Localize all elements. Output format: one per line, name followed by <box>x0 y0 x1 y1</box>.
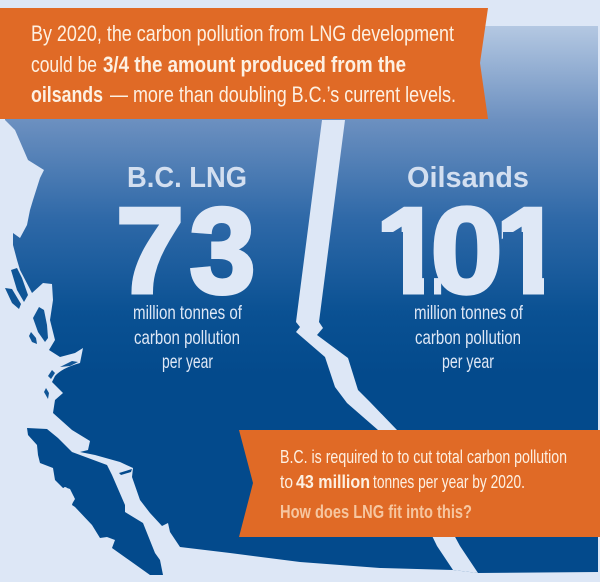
map: island lake <box>64 487 75 504</box>
banner text: 43 million <box>296 472 370 492</box>
banner text <box>280 447 567 522</box>
number: 73: 3 <box>190 182 256 318</box>
top banner <box>0 8 488 119</box>
banner text: — more than doubling B.C.’s current levels. <box>110 82 456 107</box>
banner text: tonnes per year by 2020. <box>373 472 525 492</box>
banner text: By 2020, the carbon pollution from LNG development <box>31 21 454 46</box>
caption <box>414 302 523 373</box>
banner text: could be <box>31 52 97 77</box>
number: 101: 0 <box>431 182 503 318</box>
caption: million tonnes of <box>414 302 523 324</box>
banner text: to <box>280 472 293 492</box>
map: small channel <box>119 469 132 475</box>
map: Vancouver Island <box>27 428 163 575</box>
caption: million tonnes of <box>133 302 242 324</box>
heading: B.C. LNG: B.C. LNG <box>127 162 247 194</box>
number: 101: 1 <box>376 182 442 318</box>
banner text <box>31 21 456 107</box>
caption: carbon pollution <box>415 327 521 349</box>
banner text: 3/4 the amount produced from the <box>103 52 406 77</box>
bottom banner <box>239 430 600 537</box>
map: coastal inlets <box>5 268 78 399</box>
caption: carbon pollution <box>134 327 240 349</box>
number: 73: 7 <box>116 182 184 318</box>
B.C. LNG stat <box>116 162 256 373</box>
banner text: oilsands <box>31 82 103 107</box>
heading: Oilsands: Oilsands <box>407 162 529 194</box>
number: 101: 1 <box>496 182 562 318</box>
Oilsands stat <box>382 166 544 372</box>
question: How does LNG fit into this? <box>280 502 472 522</box>
caption: per year <box>162 351 213 373</box>
caption <box>133 302 242 373</box>
map: B.C.–Alberta border strip <box>296 120 478 573</box>
caption: per year <box>442 351 494 373</box>
